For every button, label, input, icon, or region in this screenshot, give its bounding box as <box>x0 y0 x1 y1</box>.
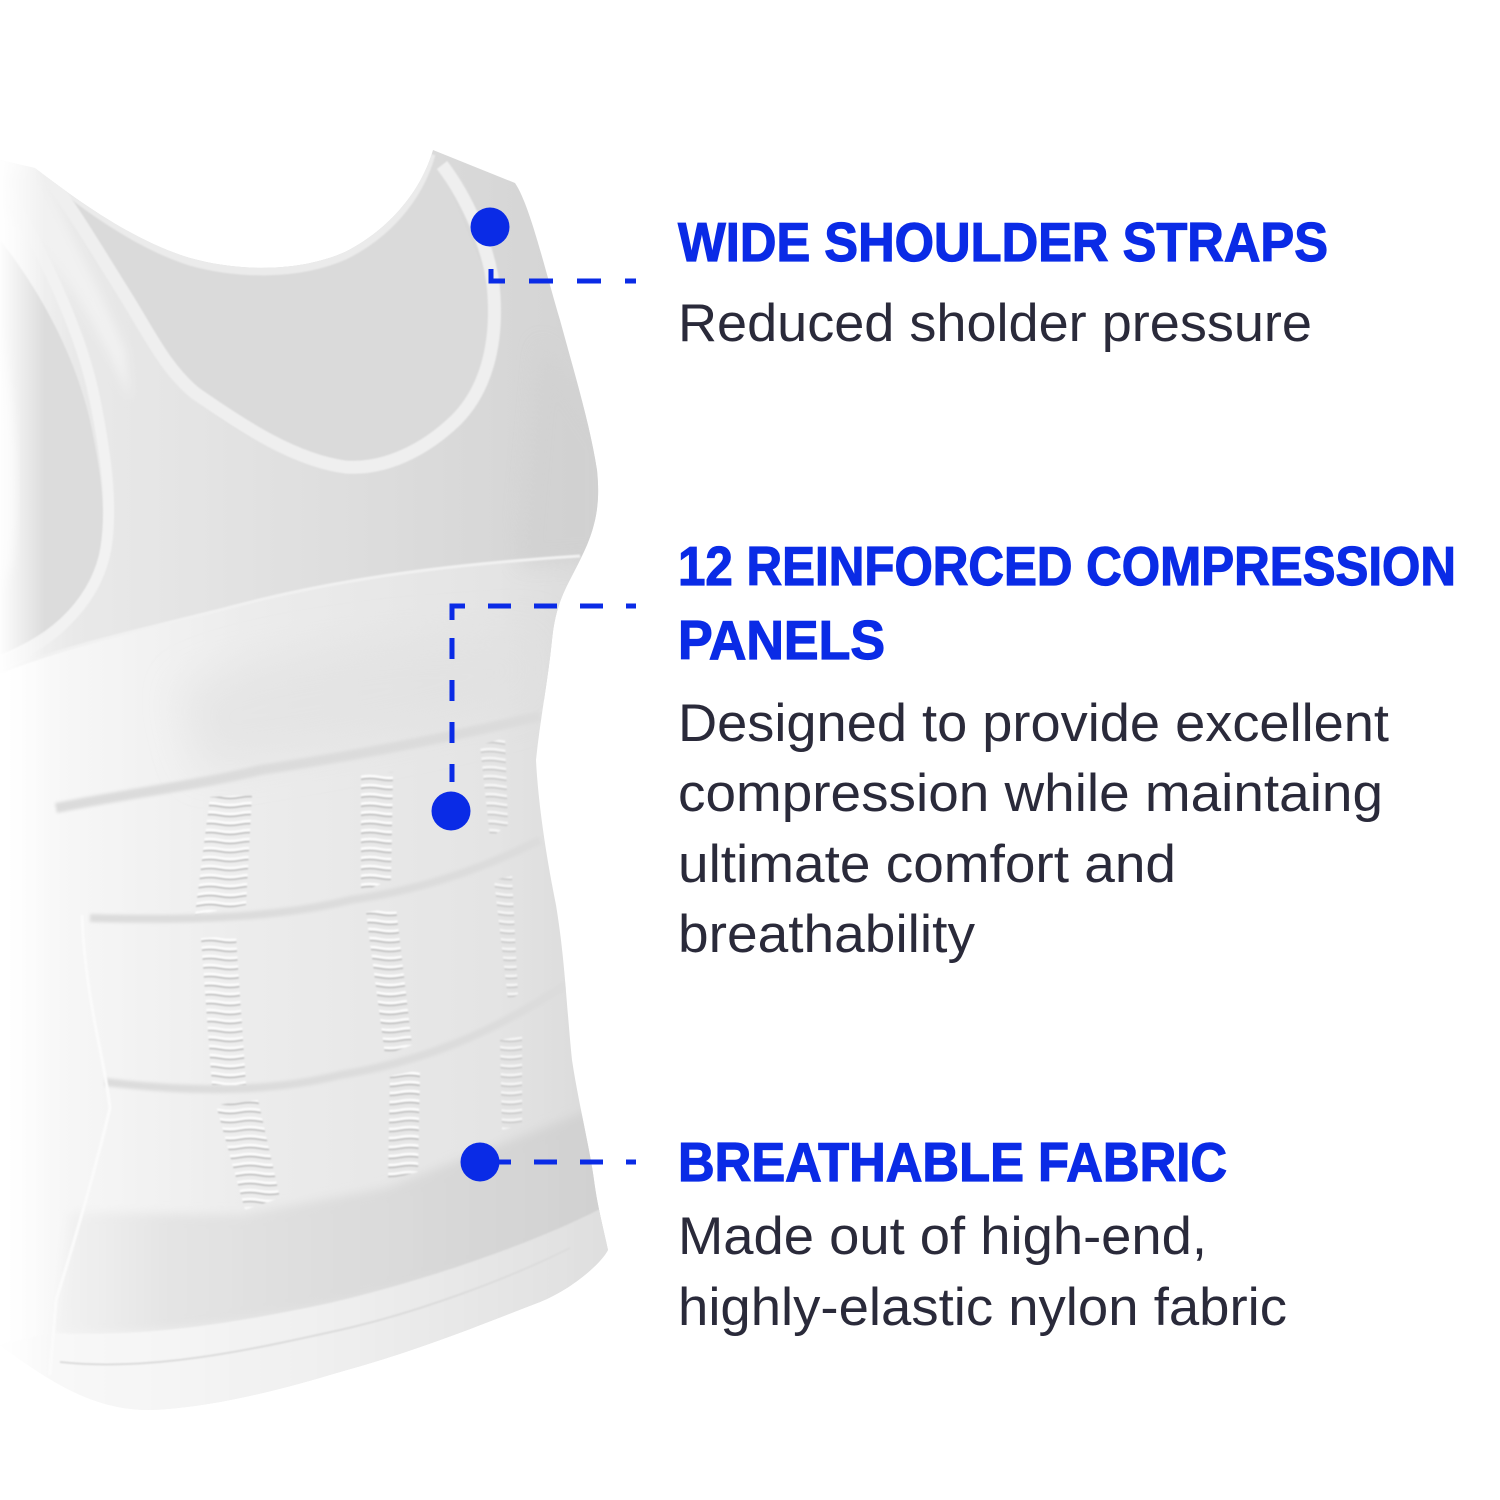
heading: WIDE SHOULDER STRAPS <box>678 211 1328 273</box>
waist panel <box>102 1116 599 1330</box>
seam band 1 <box>56 716 540 808</box>
callout: wide shoulder straps <box>470 208 1328 353</box>
neckline top hem <box>46 154 431 271</box>
dashed leader <box>452 606 636 782</box>
shirt illustration <box>0 140 620 1430</box>
armhole hem <box>66 304 114 622</box>
dashed leader <box>498 1160 636 1164</box>
description: breathability <box>678 905 976 964</box>
panel shading under band <box>180 630 540 770</box>
description: highly-elastic nylon fabric <box>678 1278 1287 1337</box>
hem band <box>150 1210 604 1334</box>
upper body base <box>0 140 620 700</box>
description: ultimate comfort and <box>678 835 1176 894</box>
dashed leader <box>491 269 636 281</box>
description: Made out of high-end, <box>678 1207 1207 1266</box>
description: Designed to provide excellent <box>678 694 1389 753</box>
back interior of neck <box>76 203 239 412</box>
side seam <box>66 1076 108 1266</box>
left strap light <box>76 262 120 361</box>
heading second line: PANELS <box>678 609 885 671</box>
lower body base <box>35 562 608 1292</box>
ruched columns row 2 <box>201 876 518 1085</box>
marker dot <box>432 792 470 830</box>
seam band 2 <box>90 857 504 924</box>
description <box>678 1207 1287 1337</box>
ruched columns row 1 <box>195 738 508 915</box>
hem ribbing line <box>60 1282 492 1366</box>
band highlight <box>36 554 580 660</box>
chest-side shadow <box>586 434 598 546</box>
description <box>678 694 1389 964</box>
description: Reduced sholder pressure <box>678 294 1312 353</box>
armhole interior <box>13 260 102 648</box>
description: compression while maintaing <box>678 764 1383 823</box>
marker dot <box>460 1142 500 1182</box>
heading: BREATHABLE FABRIC <box>678 1131 1227 1193</box>
white left fade <box>0 164 34 672</box>
seam band 3 <box>107 1022 502 1094</box>
marker dot <box>470 208 510 246</box>
neckline front scoop hem <box>42 165 494 467</box>
callout: compression panels <box>432 535 1456 964</box>
back strip inside armhole <box>0 330 16 590</box>
ruched columns row 3 <box>216 1036 522 1210</box>
callout: breathable fabric <box>460 1131 1287 1337</box>
